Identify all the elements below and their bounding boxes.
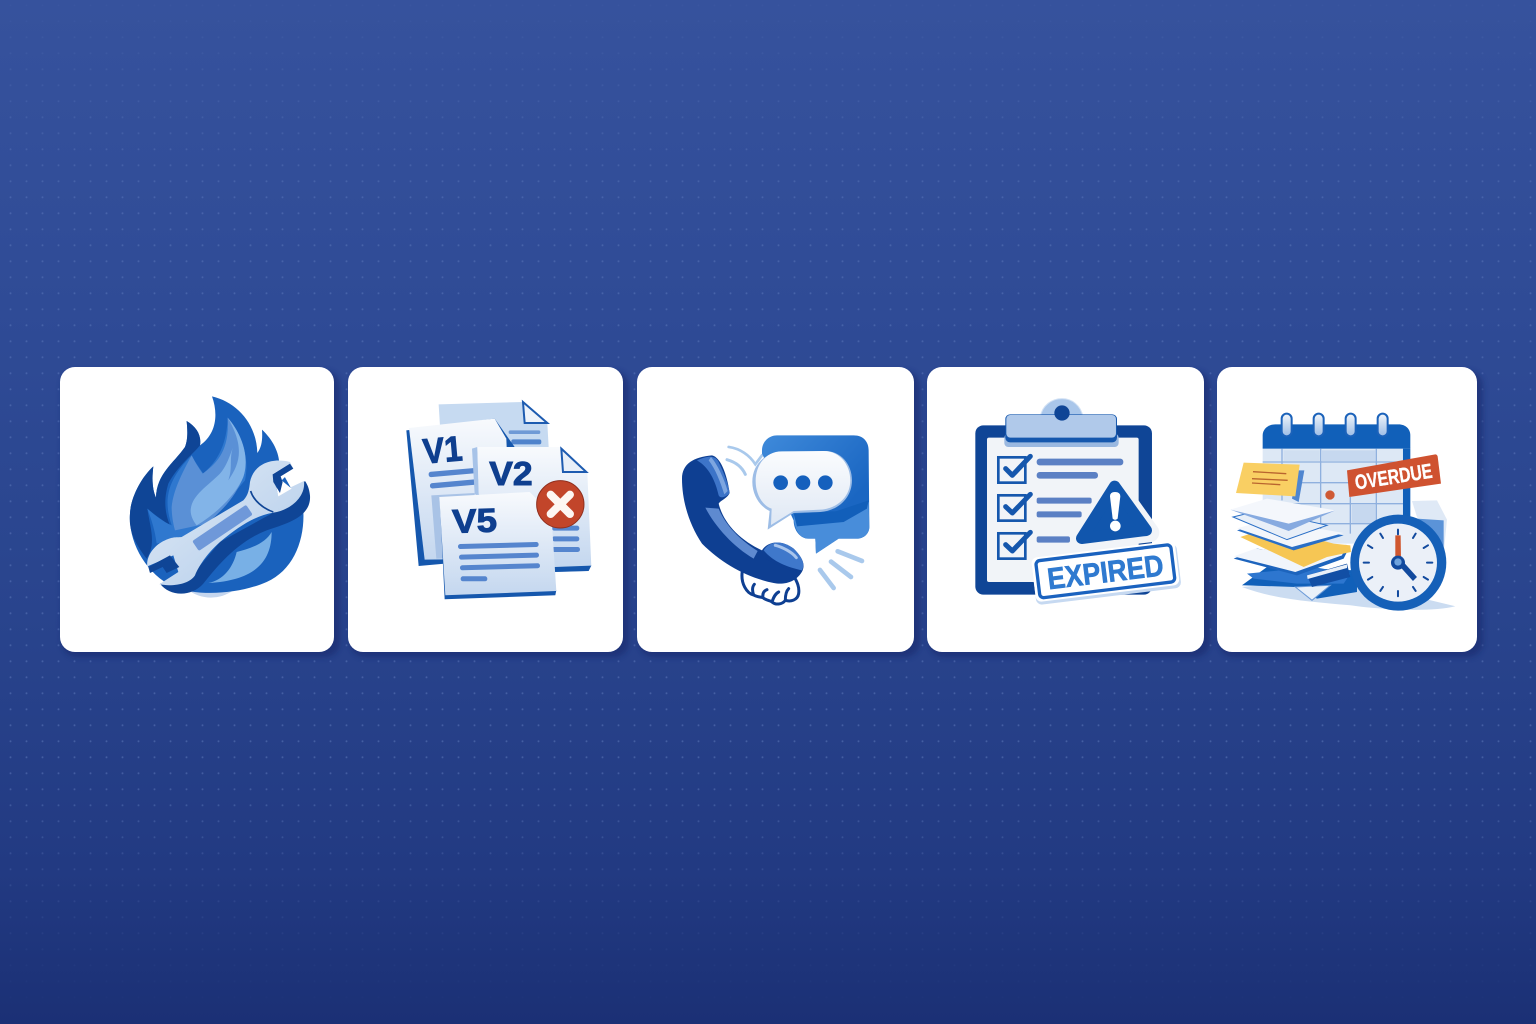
icon: conflicting document versions xyxy=(406,402,591,599)
icon: speech bubbles xyxy=(727,435,869,588)
document V1 xyxy=(406,419,515,566)
panel: document versions card xyxy=(348,367,629,657)
back document xyxy=(439,402,549,447)
document V2 xyxy=(472,447,591,572)
icon: red cross badge xyxy=(537,481,584,528)
panel: flame and wrench card xyxy=(60,367,340,657)
icon: flame with wrench xyxy=(130,396,310,598)
icon: overdue calendar with papers and clock xyxy=(1230,414,1455,611)
document V1: V1 xyxy=(421,429,464,472)
ground shadow xyxy=(1242,580,1455,610)
panel: overdue calendar card xyxy=(1217,367,1483,657)
document V5: V5 xyxy=(452,502,498,541)
document V5 xyxy=(439,492,556,599)
icon: warning triangle xyxy=(1080,484,1150,541)
panel: expired checklist card xyxy=(927,367,1210,657)
paper pile xyxy=(1230,499,1357,600)
panel: phone call card xyxy=(637,367,920,657)
stamp: EXPIRED xyxy=(1031,540,1182,605)
sign: OVERDUE: OVERDUE xyxy=(1353,460,1434,495)
calendar xyxy=(1263,414,1410,544)
sticky note xyxy=(1236,463,1304,502)
clock xyxy=(1350,515,1446,611)
clipboard clip xyxy=(1004,399,1119,447)
document V2: V2 xyxy=(489,456,533,493)
box behind clock xyxy=(1412,500,1447,554)
checklist rows xyxy=(998,456,1030,559)
phone cord xyxy=(742,571,799,604)
icon: clipboard checklist xyxy=(975,399,1182,605)
icon: telephone handset xyxy=(682,455,804,604)
stamp: EXPIRED: EXPIRED xyxy=(1046,549,1165,596)
